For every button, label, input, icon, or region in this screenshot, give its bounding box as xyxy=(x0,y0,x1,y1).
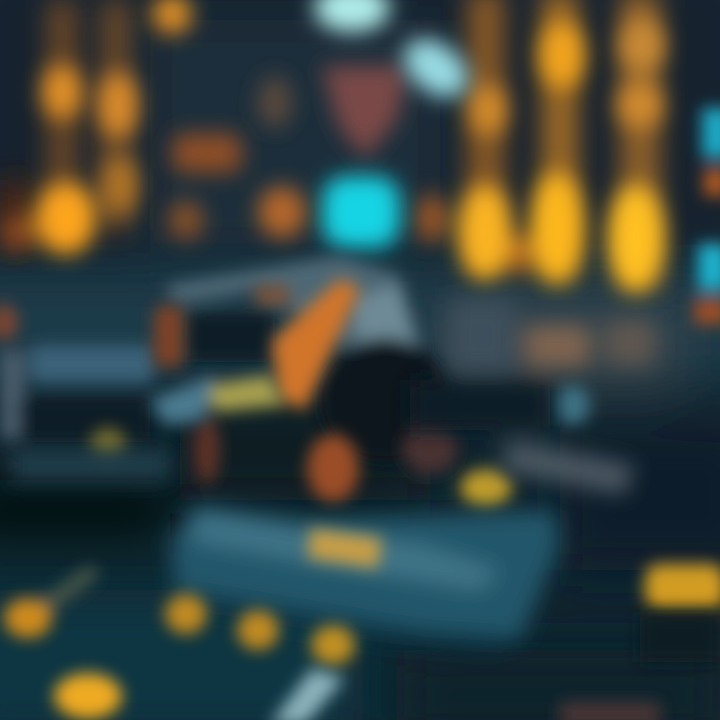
icon: central shield xyxy=(322,66,408,160)
icon: right column glows xyxy=(416,17,664,292)
panel: right orange columns xyxy=(468,0,660,285)
panel: left orange columns xyxy=(0,0,130,250)
icon: right edge lights xyxy=(694,108,720,324)
icon: upper cyan lights xyxy=(258,0,479,128)
icon: bottom yellow lights xyxy=(4,564,720,719)
icon: platform yellow label xyxy=(308,528,382,568)
icon: orange diagonal arm xyxy=(0,278,458,502)
icon: middle yellow plate xyxy=(90,375,590,507)
icon: bottom pale beam xyxy=(270,612,720,720)
icon: middle orange lights xyxy=(168,133,306,240)
icon: central cyan glow xyxy=(322,176,400,248)
icon: left column glows xyxy=(2,0,192,254)
panel: central machine xyxy=(0,255,451,462)
panel: bottom platform xyxy=(170,505,560,650)
panel: right side grey blocks xyxy=(10,300,655,495)
